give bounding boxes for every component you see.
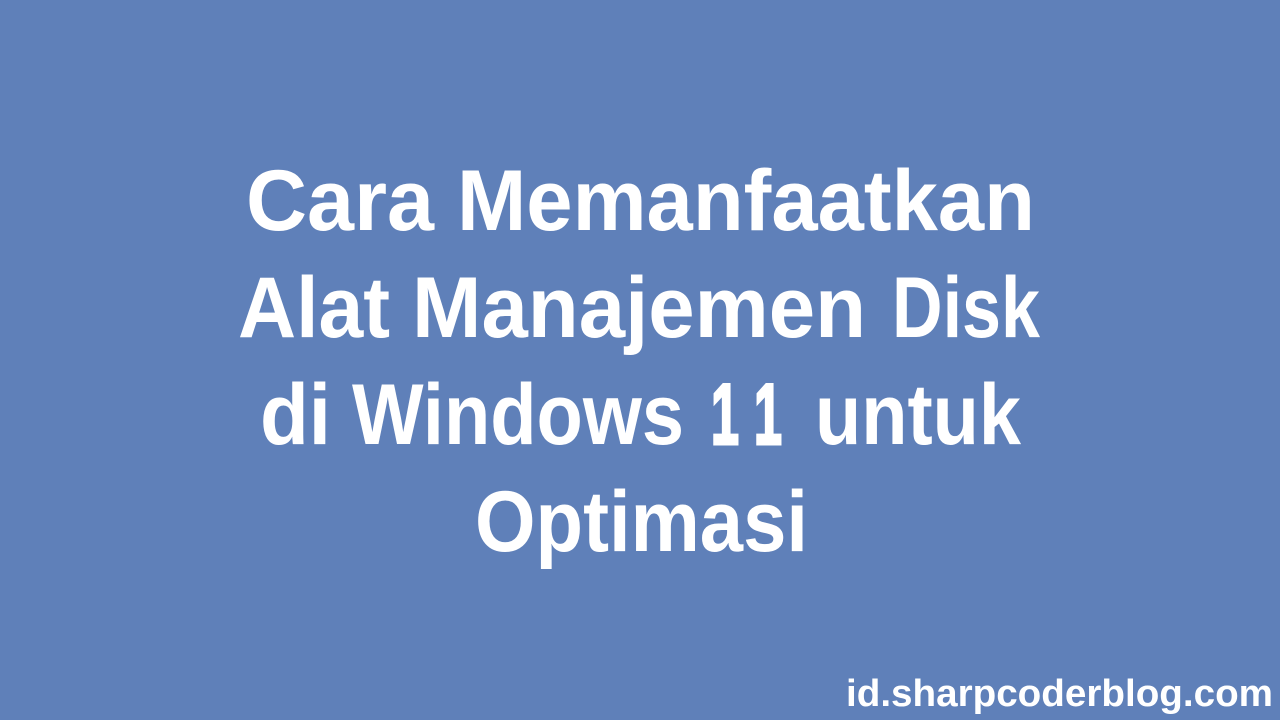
title: Manajemen	[412, 260, 866, 356]
site url: id.sharpcoderblog.com	[846, 673, 1273, 715]
title: Alat	[238, 260, 390, 356]
title: Cara	[246, 153, 435, 249]
title: Optimasi	[475, 474, 808, 570]
title: Windows	[352, 367, 684, 463]
title: Memanfaatkan	[457, 153, 1035, 249]
title: 1	[711, 367, 739, 463]
title	[238, 153, 1040, 570]
title: Disk	[892, 260, 1040, 356]
title: untuk	[815, 367, 1021, 463]
title: 1	[754, 367, 782, 463]
title: di	[260, 367, 331, 463]
